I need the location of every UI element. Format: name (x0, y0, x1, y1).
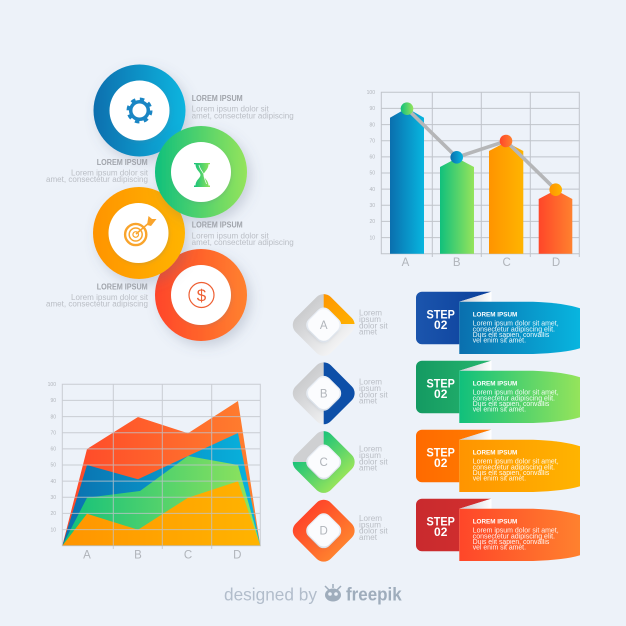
ribbon 3: STEP (427, 446, 455, 460)
ribbon 2: STEP (427, 377, 455, 391)
ribbon 2: Duis elit sapien, convallis (473, 401, 550, 408)
axis labels: 100 (48, 382, 56, 388)
diamond A text: Lorem (359, 309, 382, 318)
ribbon 2: Lorem ipsum dolor sit amet, (473, 390, 559, 397)
axis labels: A (83, 549, 91, 561)
diamond C (292, 431, 355, 493)
text: label 3: LOREM IPSUM (192, 221, 243, 230)
axis labels: 30 (50, 495, 56, 501)
ribbon 3 (416, 430, 580, 492)
circle: red dollar (155, 249, 247, 341)
diamond A text: dolor sit (359, 321, 388, 330)
text: label 3 (192, 221, 294, 247)
diamond C text: Lorem (359, 445, 382, 454)
diamond D text: dolor sit (359, 527, 388, 536)
area chart (48, 382, 260, 561)
axis labels: 90 (50, 398, 56, 404)
ribbon 3: Lorem ipsum dolor sit amet, (473, 459, 559, 466)
ribbon 1: consectetur adipiscing elit. (473, 326, 555, 333)
data points (401, 102, 562, 196)
diamond D (289, 496, 359, 566)
diamond C text: dolor sit (359, 457, 388, 466)
icon: gear (128, 99, 151, 122)
axis labels: 90 (369, 106, 375, 112)
diamond B text: dolor sit (359, 390, 388, 399)
ribbon 1: vel enim sit amet. (473, 338, 526, 345)
ribbon 4: Lorem ipsum dolor sit amet, (473, 528, 559, 535)
ribbon 2: consectetur adipiscing elit. (473, 395, 555, 402)
icon: freepik mascot (325, 584, 341, 602)
circle: green hourglass (155, 126, 247, 218)
icon: dollar coin: $ (197, 286, 207, 305)
axis labels: A (402, 257, 410, 269)
axis labels: 20 (50, 511, 56, 517)
ribbon 1: 02 (434, 318, 448, 332)
axis labels: 50 (50, 463, 56, 469)
diamond A text: ipsum (359, 315, 381, 324)
ribbon 4: STEP (427, 515, 455, 529)
diamond A text (359, 309, 388, 337)
ribbon 1 (416, 292, 580, 354)
diamond B text: amet (359, 397, 378, 406)
diamond C text: ipsum (359, 451, 381, 460)
axis labels: 40 (369, 187, 375, 193)
text: label 2: amet, consectetur adipiscing (46, 175, 148, 184)
diamond D text: ipsum (359, 520, 381, 529)
text: label 1: amet, consectetur adipiscing (192, 111, 294, 120)
circle: blue gear (94, 64, 186, 156)
text: label 4: amet, consectetur adipiscing (46, 300, 148, 309)
diamond B text: Lorem (359, 378, 382, 387)
ribbon 3: 02 (434, 456, 448, 470)
diamond D: D (320, 526, 328, 538)
diamond D text (359, 514, 388, 542)
ribbon 1: Duis elit sapien, convallis (473, 332, 550, 339)
axis labels: B (453, 257, 461, 269)
axis labels: D (552, 257, 560, 269)
diamond B text: ipsum (359, 384, 381, 393)
icon: target (125, 216, 156, 245)
footer: freepik credit (224, 584, 403, 604)
axis labels: 10 (50, 527, 56, 533)
axis labels (367, 90, 560, 269)
footer: freepik credit: designed by (224, 584, 317, 604)
text: label 2: Lorem ipsum dolor sit (71, 168, 149, 177)
circle: orange target (93, 187, 185, 279)
text: label 3: Lorem ipsum dolor sit (192, 231, 269, 240)
axis labels: 40 (50, 479, 56, 485)
axis labels: 70 (369, 138, 375, 144)
diamond C text (359, 445, 388, 473)
ribbon 4: consectetur adipiscing elit. (473, 533, 555, 540)
axis labels: 20 (369, 219, 375, 225)
diamond D text: Lorem (359, 514, 382, 523)
axis labels (48, 382, 241, 561)
text: label 4: Lorem ipsum dolor sit (71, 293, 149, 302)
axis labels: 30 (369, 203, 375, 209)
diamond A text: amet (359, 328, 378, 337)
diamond B: B (320, 388, 328, 400)
footer: freepik credit: freepik (346, 584, 403, 604)
text: label 1: Lorem ipsum dolor sit (192, 105, 269, 114)
panel: diamonds (289, 290, 388, 566)
diamond B text (359, 378, 388, 406)
trend line (407, 109, 556, 190)
axis labels: C (503, 257, 511, 269)
axis labels: 100 (367, 90, 375, 96)
panel: step ribbons (416, 292, 580, 561)
ribbon 4: LOREM IPSUM (473, 518, 517, 525)
diamond A (292, 294, 355, 356)
ribbon 3: Duis elit sapien, convallis (473, 470, 550, 477)
text: label 4: LOREM IPSUM (97, 282, 148, 291)
ribbon 1: STEP (427, 308, 455, 322)
ribbon 4: Duis elit sapien, convallis (473, 539, 550, 546)
ribbon 2: vel enim sit amet. (473, 407, 526, 414)
axis labels: 50 (369, 171, 375, 177)
ribbon 4: vel enim sit amet. (473, 545, 526, 552)
text: label 1: LOREM IPSUM (192, 94, 243, 103)
panel: circular steps (46, 64, 294, 341)
ribbon 3: LOREM IPSUM (473, 449, 517, 456)
ribbon 1: Lorem ipsum dolor sit amet, (473, 321, 559, 328)
axis labels: 60 (369, 155, 375, 161)
diamond A: A (320, 320, 328, 332)
ribbon 3: consectetur adipiscing elit. (473, 464, 555, 471)
axis labels: D (233, 549, 241, 561)
ribbon 4: 02 (434, 525, 448, 539)
diamond C text: amet (359, 464, 378, 473)
axis labels: 80 (50, 414, 56, 420)
text: label 2 (46, 158, 149, 184)
diamond B (292, 362, 355, 424)
axis labels: 10 (369, 235, 375, 241)
ribbon 3: vel enim sit amet. (473, 476, 526, 483)
icon: hourglass (194, 163, 210, 187)
axis labels: 70 (50, 430, 56, 436)
text: label 4 (46, 282, 149, 309)
axis labels: 60 (50, 447, 56, 453)
bars (390, 108, 572, 254)
ribbon 4 (416, 499, 580, 561)
diamond C: C (320, 457, 328, 469)
areas (62, 401, 260, 546)
ribbon 2: LOREM IPSUM (473, 380, 517, 387)
text: label 1 (192, 94, 294, 120)
ribbon 1: LOREM IPSUM (473, 311, 517, 318)
axis labels: C (184, 549, 192, 561)
ribbon 2 (416, 361, 580, 423)
text: label 3: amet, consectetur adipiscing (192, 238, 294, 247)
bar chart (367, 90, 579, 269)
ribbon 2: 02 (434, 387, 448, 401)
diamond D text: amet (359, 533, 378, 542)
axis labels: 80 (369, 122, 375, 128)
axis labels: B (134, 549, 142, 561)
text: label 2: LOREM IPSUM (97, 158, 148, 167)
